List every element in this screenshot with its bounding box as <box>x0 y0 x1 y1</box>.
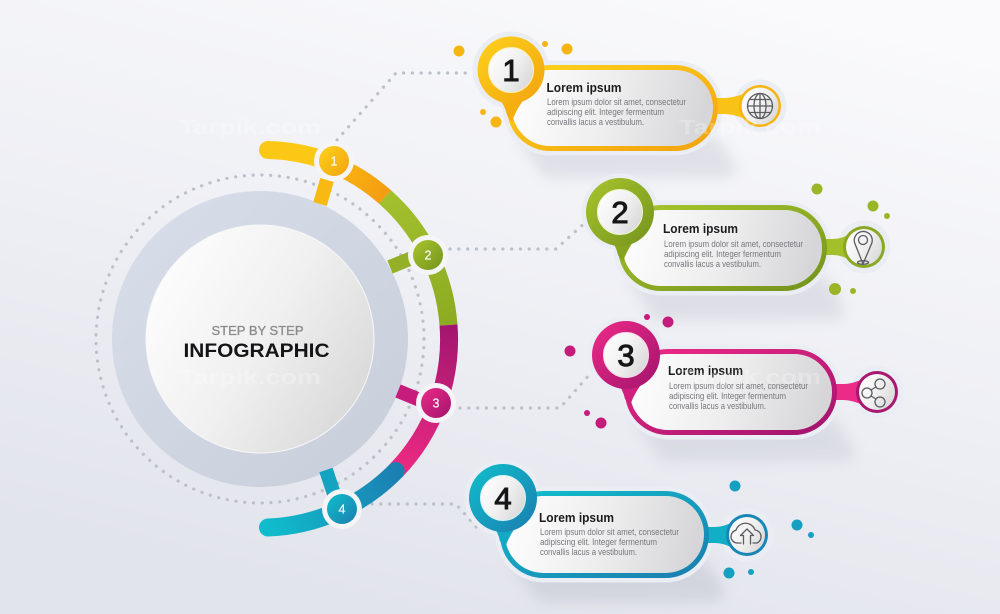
central circle group <box>96 175 424 503</box>
white disc <box>146 225 374 453</box>
panel: step 2: 2 <box>611 195 629 230</box>
connector <box>833 378 865 406</box>
body text: convallis lacus a vestibulum. <box>540 547 637 557</box>
heading: Lorem ipsum <box>546 81 622 95</box>
node 3 <box>416 383 456 423</box>
panel: step 4 <box>469 464 814 602</box>
tick: yellow <box>320 180 327 204</box>
connector <box>714 92 748 120</box>
heading: Lorem ipsum <box>668 364 743 378</box>
icon: globe <box>739 85 781 127</box>
watermarks: Tarpik.com <box>679 367 821 389</box>
node 1: 1 <box>331 154 338 168</box>
icon: cloud upload <box>726 514 768 556</box>
panel: step 1 <box>454 36 782 178</box>
node 1 <box>314 141 354 181</box>
arc magenta <box>396 325 449 471</box>
halo <box>586 178 886 291</box>
card shadow <box>625 275 845 320</box>
watermarks: Tarpik.com <box>179 117 321 139</box>
body text: Lorem ipsum dolor sit amet, consectetur <box>540 527 679 537</box>
body text: adipiscing elit. Integer fermentum <box>540 537 657 547</box>
heading: Lorem ipsum <box>539 511 614 525</box>
arc green <box>385 197 448 325</box>
node 4: 4 <box>339 502 346 516</box>
decorative dots <box>724 480 814 578</box>
panel: step 1: 1 <box>502 53 520 88</box>
halo <box>592 321 899 435</box>
dotted connectors <box>337 73 590 527</box>
body text: adipiscing elit. Integer fermentum <box>669 391 786 401</box>
panel: step 3 <box>564 314 899 462</box>
panel: step 4: 4 <box>494 481 512 516</box>
decorative dots <box>454 41 572 128</box>
number badge <box>497 92 530 122</box>
tick: magenta <box>398 391 420 400</box>
body text: convallis lacus a vestibulum. <box>664 259 761 269</box>
panel: step 3: 3 <box>617 338 635 373</box>
body text: convallis lacus a vestibulum. <box>547 117 644 127</box>
body text: Lorem ipsum dolor sit amet, consectetur <box>547 97 686 107</box>
dotted orbit <box>96 175 424 503</box>
card shadow <box>515 135 738 178</box>
card shadow <box>507 560 725 602</box>
icon: map pin <box>843 226 885 268</box>
decorative dots <box>564 314 674 428</box>
card shadow <box>632 418 855 462</box>
halo <box>469 464 769 578</box>
body text: Lorem ipsum dolor sit amet, consectetur <box>669 381 808 391</box>
card body <box>628 352 834 432</box>
icon: share <box>856 371 898 413</box>
tick: green <box>390 258 412 267</box>
node 3: 3 <box>433 396 440 410</box>
card body <box>502 494 706 576</box>
node 2 <box>408 235 448 275</box>
number badge <box>490 518 523 548</box>
node 2: 2 <box>425 248 432 262</box>
arc blue to cyan <box>268 471 396 528</box>
decorative dots <box>812 184 890 295</box>
heading: infographic: INFOGRAPHIC <box>184 341 330 362</box>
number badge <box>615 376 648 406</box>
card body <box>620 208 824 288</box>
heading: step by step: STEP BY STEP <box>212 324 304 338</box>
body text: Lorem ipsum dolor sit amet, consectetur <box>664 239 803 249</box>
halo <box>477 36 782 151</box>
arc start yellow <box>268 150 335 164</box>
body text: adipiscing elit. Integer fermentum <box>664 249 781 259</box>
body text: convallis lacus a vestibulum. <box>669 401 766 411</box>
watermarks: Tarpik.com <box>679 117 821 139</box>
panel: step 2 <box>586 178 890 320</box>
node 4 <box>322 489 362 529</box>
body text: adipiscing elit. Integer fermentum <box>547 107 664 117</box>
connector <box>823 233 852 261</box>
arc orange <box>330 163 385 197</box>
connector <box>705 521 735 549</box>
card body <box>510 68 716 148</box>
tick: blue <box>326 470 334 494</box>
timeline arc <box>268 150 449 528</box>
heading: Lorem ipsum <box>663 222 738 236</box>
watermarks: Tarpik.com <box>179 367 321 389</box>
number badge <box>608 232 641 262</box>
grey ring <box>112 191 408 487</box>
watermarks <box>179 117 821 389</box>
